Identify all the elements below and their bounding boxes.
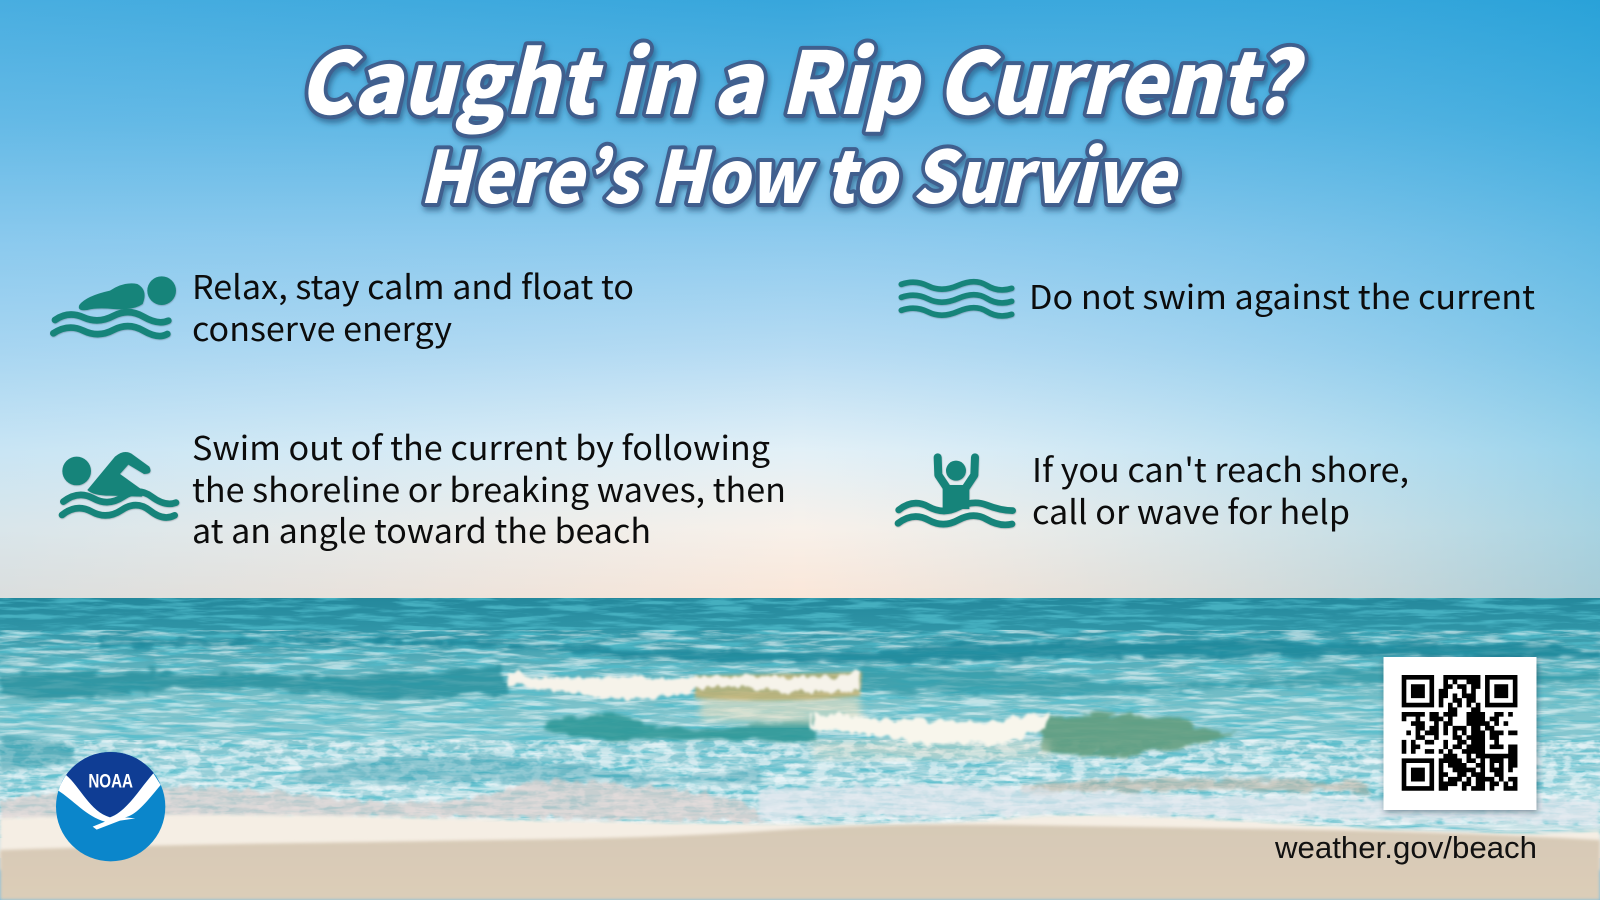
title [298,14,1307,224]
text: call or wave for help: call or wave for help [1032,486,1350,534]
text: call or wave for help: If you can't reach shore, [1032,444,1409,492]
url text: weather.gov/beach [1274,830,1537,865]
text: swim out of the current: the shoreline or breaking waves, then [192,464,786,512]
text: swim out of the current [192,422,786,553]
text: swim out of the current: Swim out of the current by following [192,422,770,470]
background: ocean waves [0,598,1600,900]
icon: swimmer freestyle [62,452,176,517]
text: relax and float [192,261,634,351]
NOAA logo [56,752,166,862]
text: relax and float: Relax, stay calm and float to [192,261,634,309]
title line 2: Here’s How to Survive [419,119,1181,224]
title line 1: Caught in a Rip Current? [298,14,1307,139]
text: call or wave for help [1032,444,1409,534]
text: relax and float: conserve energy [192,303,452,351]
text: swim out of the current: at an angle toward the beach [192,505,651,553]
icon: three waves [901,282,1012,316]
QR code [1384,657,1536,810]
icon: person waving for help [898,457,1013,525]
text: do not swim against the current: Do not swim against the current [1029,271,1535,319]
NOAA logo: NOAA [88,771,133,792]
icon: floating swimmer [53,276,176,336]
background: sky [0,0,1600,600]
